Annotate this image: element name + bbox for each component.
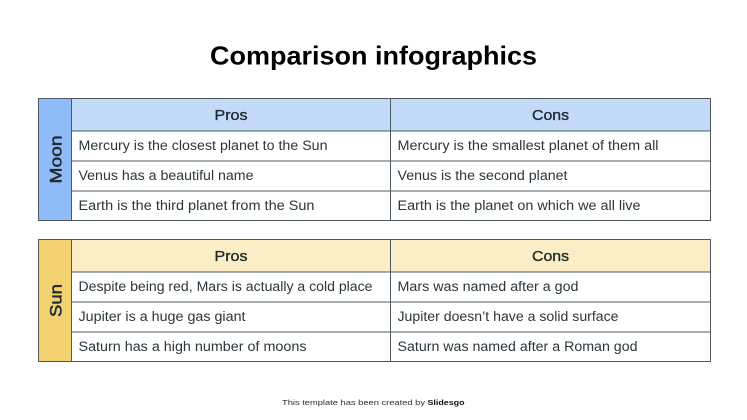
sun row text: Mars was named after a god bbox=[398, 279, 578, 294]
panel: sun table bbox=[38, 240, 710, 362]
moon row text: Mercury is the closest planet to the Sun bbox=[78, 138, 328, 153]
moon side label bbox=[38, 98, 72, 220]
sun row text: Jupiter doesn’t have a solid surface bbox=[398, 309, 618, 324]
panel: moon table bbox=[38, 98, 710, 220]
sun cons header bbox=[390, 240, 710, 272]
title: Comparison infographics bbox=[210, 40, 537, 70]
sun row text bbox=[78, 279, 638, 354]
moon row text: Earth is the third planet from the Sun bbox=[78, 198, 314, 213]
sun cons header: Cons bbox=[532, 248, 569, 265]
footer credit: Slidesgo bbox=[428, 398, 465, 407]
moon pros header: Pros bbox=[214, 107, 248, 124]
footer credit bbox=[282, 398, 465, 407]
sun row text: Despite being red, Mars is actually a cold place bbox=[78, 279, 372, 294]
moon cons header bbox=[390, 98, 710, 131]
footer credit: This template has been created by bbox=[282, 398, 425, 407]
sun row text: Saturn was named after a Roman god bbox=[398, 339, 638, 354]
moon row text: Venus has a beautiful name bbox=[78, 168, 254, 183]
sun row text: Jupiter is a huge gas giant bbox=[78, 309, 246, 324]
sun row text: Saturn has a high number of moons bbox=[78, 339, 307, 354]
moon cons header: Cons bbox=[532, 107, 569, 124]
moon pros header bbox=[72, 98, 390, 131]
moon side label: Moon bbox=[46, 136, 66, 184]
sun side label: Sun bbox=[46, 284, 66, 317]
moon row text bbox=[78, 138, 658, 213]
sun pros header bbox=[72, 240, 390, 272]
moon row text: Venus is the second planet bbox=[398, 168, 568, 183]
moon row text: Earth is the planet on which we all live bbox=[398, 198, 640, 213]
sun side label bbox=[38, 240, 72, 362]
sun pros header: Pros bbox=[214, 248, 248, 265]
moon row text: Mercury is the smallest planet of them all bbox=[398, 138, 658, 153]
